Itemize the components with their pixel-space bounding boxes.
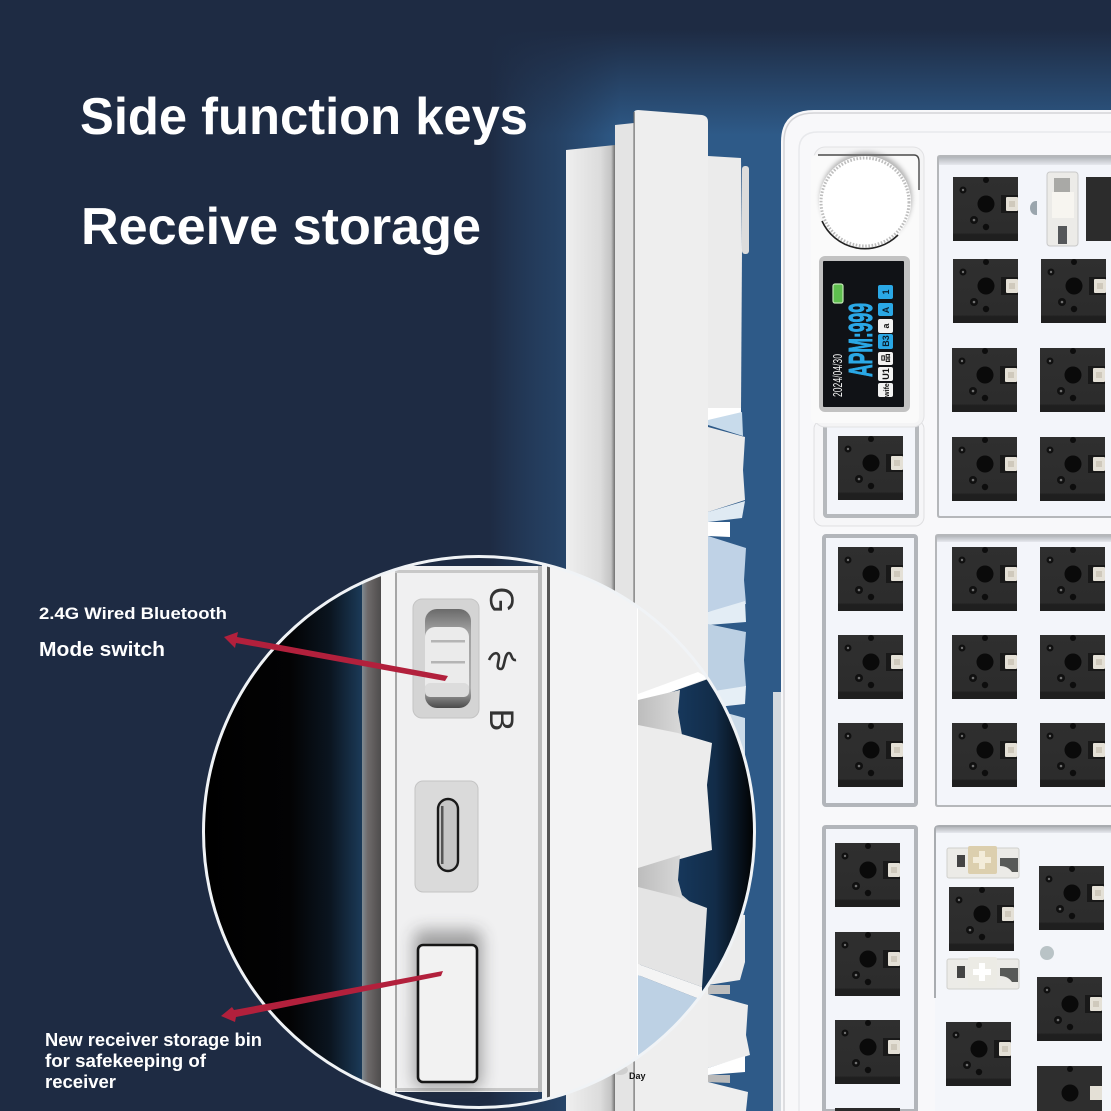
- status chips: wife: [884, 383, 891, 398]
- Day label: Day: [629, 1071, 646, 1081]
- magnifier circle: [203, 556, 756, 1109]
- date text: 2024/04/30: [830, 354, 845, 397]
- title: [80, 88, 528, 256]
- status chips: A: [881, 306, 891, 313]
- APM text: APM:999: [842, 303, 879, 377]
- callout: storage bin: for safekeeping of: [45, 1051, 207, 1071]
- screen: [819, 256, 910, 412]
- module: knob and screen: [811, 147, 924, 427]
- knob edge: [742, 166, 749, 254]
- side upper case: [708, 156, 742, 410]
- knob: [819, 152, 912, 249]
- stabilizer lower: [947, 957, 1019, 989]
- panel: top key well: [938, 156, 1111, 517]
- panel: middle right key well: [936, 535, 1111, 806]
- Day label: [612, 1065, 646, 1081]
- keyboard side profile: [566, 110, 750, 1111]
- switch labels: G: [482, 587, 520, 613]
- lower key blue: [638, 975, 697, 1055]
- side plate outer: [566, 145, 615, 1111]
- panel: middle left key well: [824, 536, 916, 805]
- stabilizer upper: [947, 846, 1019, 878]
- key shadow piece 2: [638, 855, 690, 902]
- stabilizer top: [1030, 172, 1078, 246]
- switch labels: [488, 588, 516, 730]
- sockets: [946, 866, 1104, 1111]
- lens dark band: [362, 556, 381, 1109]
- status chips: 品: [881, 353, 891, 363]
- keyboard body: [773, 110, 1111, 1111]
- screw: [1040, 946, 1054, 960]
- side plate main: [634, 110, 708, 1111]
- upper key: [638, 609, 707, 694]
- side plate middle: [615, 123, 634, 1111]
- lens ring: [204, 556, 754, 1108]
- side panel: [381, 556, 638, 1109]
- key 2: [638, 725, 712, 871]
- status chips: a: [881, 323, 891, 329]
- arrow: mode switch: [224, 632, 448, 681]
- plate: [781, 110, 1111, 1111]
- side keycaps: [708, 408, 750, 1111]
- lens left background: [205, 584, 362, 1080]
- USB-C port: [415, 781, 478, 892]
- receiver storage bin: [414, 930, 482, 1088]
- callout: storage bin: [45, 1030, 262, 1092]
- lens right background: [640, 680, 753, 998]
- status chips: B3: [881, 335, 891, 347]
- switch sockets top block: [952, 177, 1111, 501]
- callout: mode switch: [39, 604, 227, 661]
- callout: mode switch: 2.4G Wired Bluetooth: [39, 604, 227, 623]
- callout: storage bin: receiver: [45, 1072, 116, 1092]
- status chips: [878, 285, 893, 398]
- panel: lone key well: [814, 420, 924, 526]
- switch labels: B: [482, 709, 520, 731]
- title line 1: Side function keys: [80, 88, 528, 146]
- switch: [413, 599, 479, 718]
- callout: mode switch: Mode switch: [39, 639, 165, 661]
- lower case step: [773, 692, 783, 1111]
- key shadow piece 1: [638, 690, 682, 734]
- status chips: U1: [881, 368, 891, 380]
- battery: [833, 284, 843, 303]
- panel: bottom right key well: [935, 826, 1111, 1111]
- arrow: storage bin: [221, 971, 443, 1022]
- callout: storage bin: New receiver storage bin: [45, 1030, 262, 1050]
- status chips: 1: [881, 289, 891, 295]
- panel: bottom left key well: [824, 827, 916, 1111]
- title line 2: Receive storage: [81, 198, 481, 256]
- key 3: [638, 887, 707, 987]
